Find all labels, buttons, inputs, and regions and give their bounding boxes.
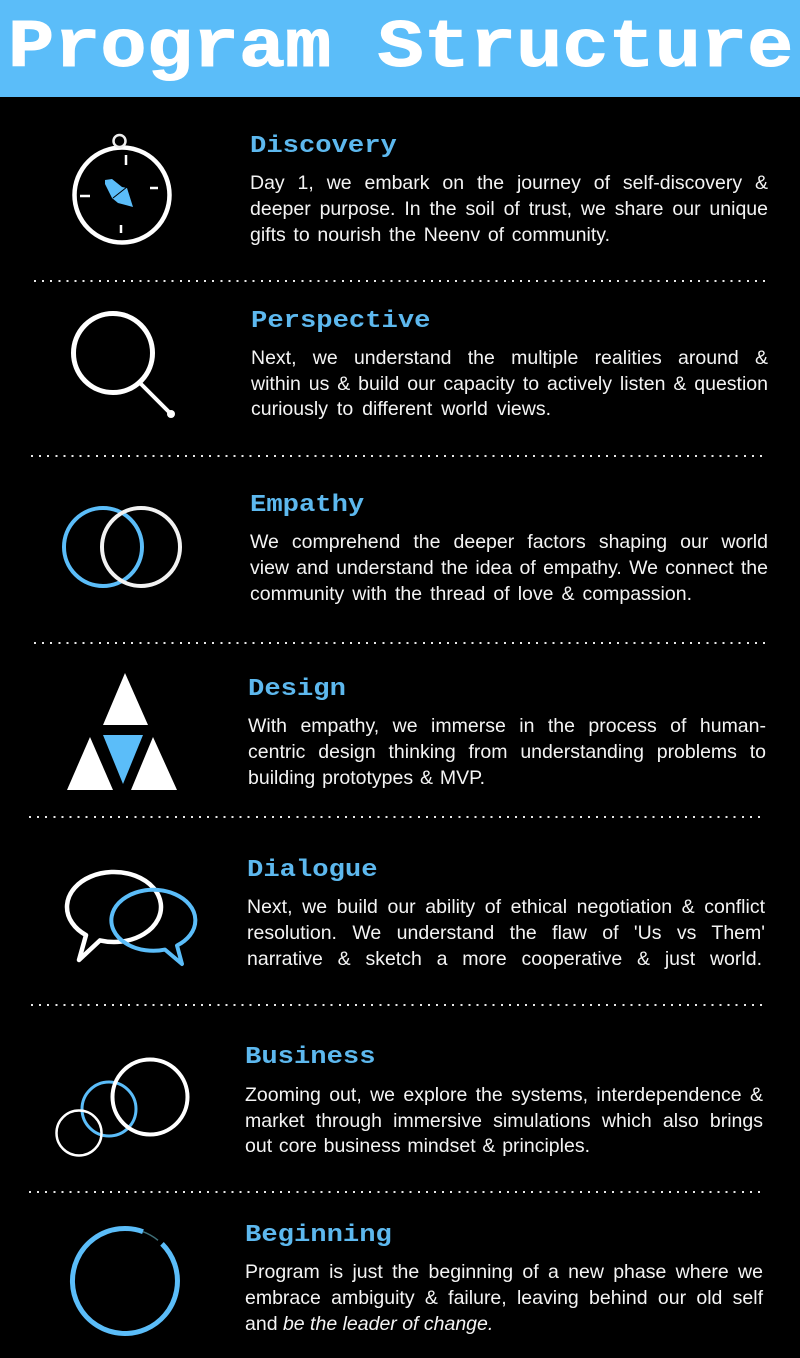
text: empathy bbox=[250, 531, 768, 605]
text: design: With empathy, we immerse in the process of human- bbox=[248, 715, 766, 737]
title banner bbox=[0, 0, 800, 97]
text: beginning: Program is just the beginning of a new phase where we bbox=[245, 1261, 763, 1283]
heading: beginning: Beginning bbox=[245, 1222, 392, 1249]
text: design: centric design thinking from understanding problems to bbox=[248, 741, 766, 763]
text: perspective: Next, we understand the multiple realities around & bbox=[251, 347, 768, 369]
text: dialogue: narrative & sketch a more cooperative & just world. bbox=[247, 948, 762, 970]
text: perspective: within us & build our capacity to actively listen & question bbox=[251, 373, 768, 395]
text: perspective: curiously to different world views. bbox=[251, 398, 551, 420]
text: beginning bbox=[245, 1261, 764, 1335]
text: perspective bbox=[251, 347, 768, 420]
panel: perspective bbox=[251, 308, 768, 420]
title: Program Structure bbox=[8, 10, 793, 87]
text: discovery: Day 1, we embark on the journey of self-discovery & bbox=[250, 172, 768, 194]
heading: perspective: Perspective bbox=[251, 308, 431, 335]
panel: discovery bbox=[250, 133, 768, 246]
text: beginning: embrace ambiguity & failure, leaving behind our old self bbox=[245, 1287, 763, 1309]
text: discovery bbox=[250, 172, 768, 246]
text: business: Zooming out, we explore the systems, interdependence & bbox=[245, 1084, 763, 1106]
text: business: out core business mindset & principles. bbox=[245, 1135, 590, 1157]
text: empathy: community with the thread of love & compassion. bbox=[250, 583, 692, 605]
panel: beginning bbox=[245, 1222, 764, 1335]
text: business bbox=[245, 1084, 763, 1157]
text: dialogue: resolution. We understand the flaw of 'Us vs Them' bbox=[247, 922, 765, 944]
heading: business: Business bbox=[245, 1044, 376, 1071]
heading: discovery: Discovery bbox=[250, 133, 397, 160]
text: discovery: gifts to nourish the Neenv of community. bbox=[250, 224, 610, 246]
panel: design bbox=[248, 676, 766, 789]
text: empathy: view and understand the idea of empathy. We connect the bbox=[250, 557, 768, 579]
text: dialogue bbox=[247, 896, 765, 970]
panel: empathy bbox=[250, 492, 768, 605]
text: dialogue: Next, we build our ability of ethical negotiation & conflict bbox=[247, 896, 765, 918]
text: design bbox=[248, 715, 766, 789]
text: design: building prototypes & MVP. bbox=[248, 767, 485, 789]
text: discovery: deeper purpose. In the soil of trust, we share our unique bbox=[250, 198, 768, 220]
heading: dialogue: Dialogue bbox=[247, 857, 378, 884]
text: beginning: and be the leader of change. bbox=[245, 1313, 493, 1335]
panel: dialogue bbox=[247, 857, 765, 970]
heading: empathy: Empathy bbox=[250, 492, 364, 519]
heading: design: Design bbox=[248, 676, 346, 703]
panel: business bbox=[245, 1044, 763, 1157]
text: business: market through immersive simulations which also brings bbox=[245, 1110, 763, 1132]
text: empathy: We comprehend the deeper factors shaping our world bbox=[250, 531, 768, 553]
